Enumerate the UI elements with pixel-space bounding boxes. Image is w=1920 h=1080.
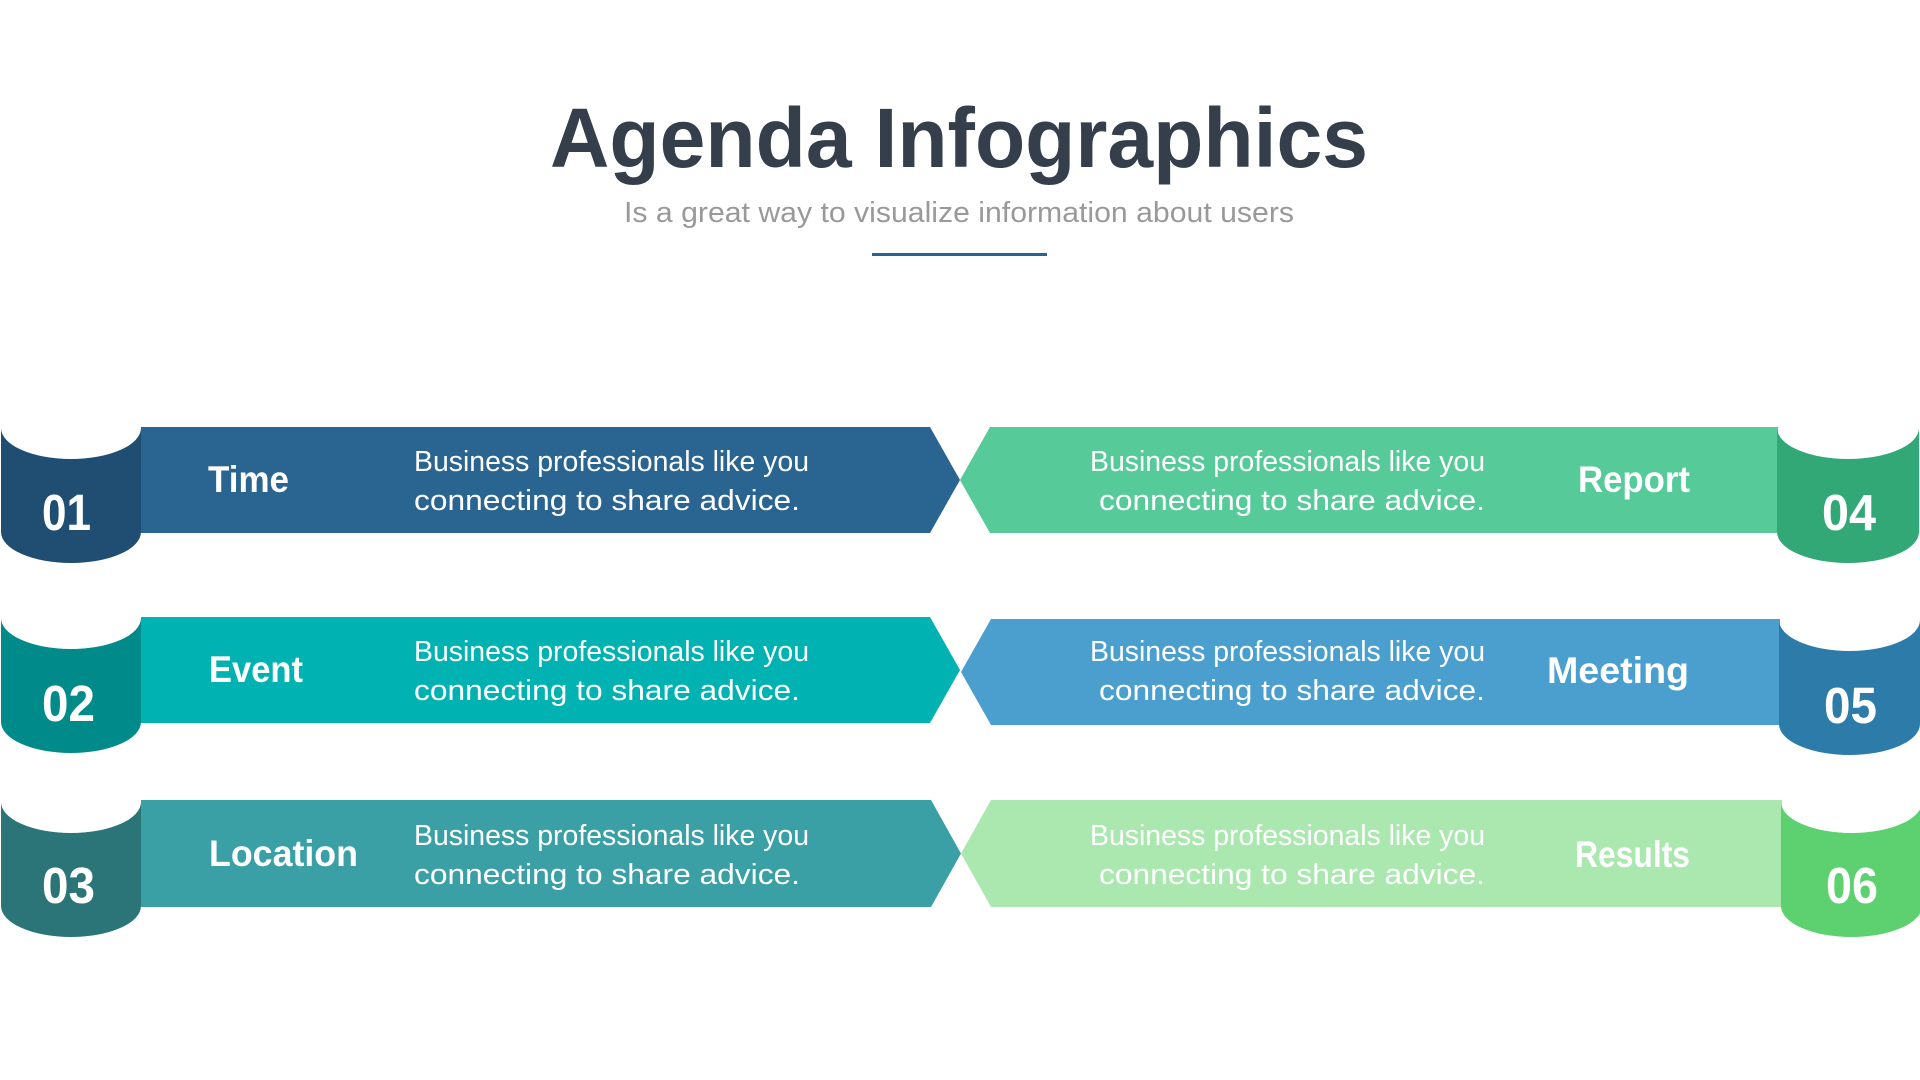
number: 02: 02 [42, 675, 95, 732]
cylinder: 01 [1, 428, 141, 563]
description: Meeting: Business professionals like you [1090, 636, 1485, 668]
cylinder: 06 [1781, 802, 1920, 937]
cylinder: 05 [1779, 620, 1920, 755]
panel: 02 Event [1, 617, 960, 753]
number: 04: 04 [1822, 484, 1877, 541]
description: Meeting: connecting to share advice. [1099, 675, 1485, 707]
label: Time: Time [208, 459, 289, 500]
panel: 05 Meeting [961, 619, 1920, 755]
number: 01: 01 [42, 484, 91, 541]
description: Report: Business professionals like you [1090, 446, 1485, 478]
band: Results [961, 800, 1782, 907]
panel: 03 Location [1, 800, 961, 937]
description: Location: connecting to share advice. [414, 859, 800, 891]
label: Meeting: Meeting [1547, 650, 1689, 691]
cylinder: 02 [1, 618, 141, 753]
description: Results: Business professionals like you [1090, 820, 1485, 852]
cylinder: 04 [1777, 428, 1919, 563]
band: Event [141, 617, 960, 723]
band: Meeting [961, 619, 1780, 725]
description: Report: connecting to share advice. [1099, 485, 1485, 517]
description: Event: Business professionals like you [414, 636, 809, 668]
panel: 04 Report [960, 427, 1919, 563]
description: Event: connecting to share advice. [414, 675, 800, 707]
subtitle: Is a great way to visualize information about users [624, 197, 1294, 229]
panel: 06 Results [961, 800, 1920, 937]
number: 03: 03 [42, 857, 95, 914]
band: Location [141, 800, 961, 907]
label: Results: Results [1575, 834, 1690, 875]
label: Report: Report [1578, 459, 1690, 500]
number: 05: 05 [1824, 677, 1877, 734]
band: Time [141, 427, 960, 533]
description: Results: connecting to share advice. [1099, 859, 1485, 891]
cylinder: 03 [1, 802, 141, 937]
label: Location: Location [209, 833, 358, 874]
panel: 01 Time [1, 427, 960, 563]
band: Report [960, 427, 1778, 533]
description: Time: Business professionals like you [414, 446, 809, 478]
title underline [872, 253, 1047, 256]
description: Location: Business professionals like you [414, 820, 809, 852]
number: 06: 06 [1826, 857, 1878, 914]
title: Agenda Infographics [550, 91, 1368, 185]
label: Event: Event [209, 649, 303, 690]
description: Time: connecting to share advice. [414, 485, 800, 517]
